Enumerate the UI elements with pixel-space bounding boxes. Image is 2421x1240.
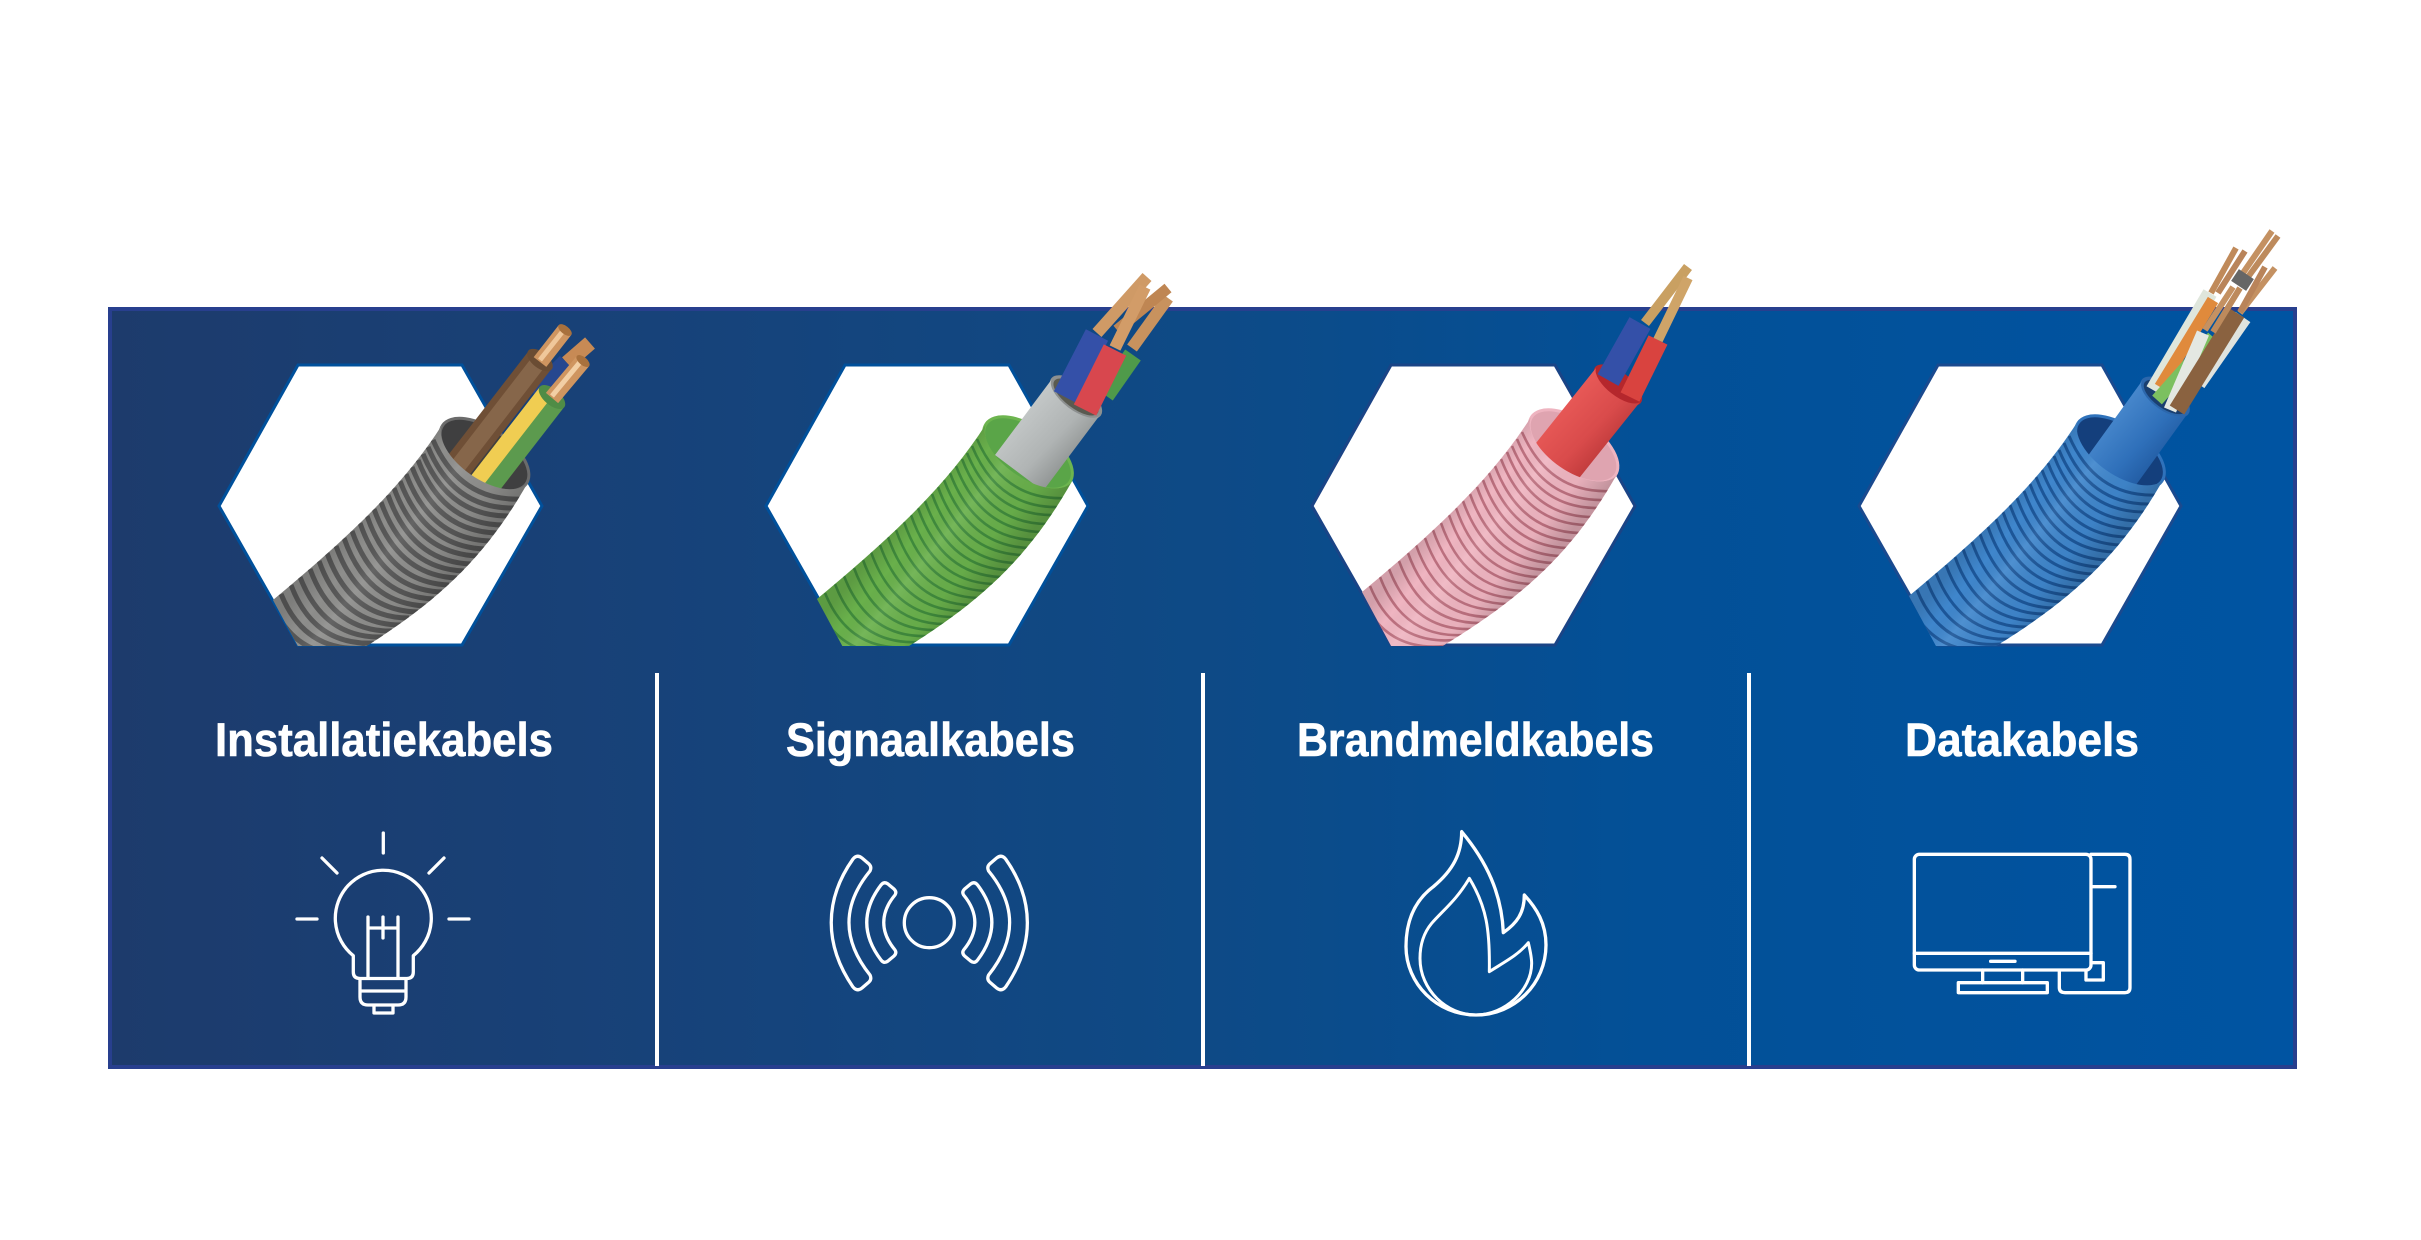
column: Signaalkabels [766,277,1168,990]
title: Brandmeldkabels: Brandmeldkabels [1297,713,1654,766]
title: Signaalkabels: Signaalkabels [786,713,1075,766]
title: Installatiekabels: Installatiekabels [215,713,553,766]
icon: signal waves [831,856,1027,990]
column: Installatiekabels [215,322,592,1013]
panel: blue background band [110,309,2295,1067]
title: Datakabels: Datakabels [1905,713,2139,766]
hexagon: datakabels [1859,365,2181,645]
hexagon: signaalkabels [766,365,1088,645]
cable: blue conduit with data wires [1909,229,2280,646]
icon: light bulb [297,833,469,1013]
hexagon: installatiekabels [219,365,542,645]
icon: flame [1406,832,1546,1015]
divider 3 [1747,673,1751,1066]
hexagon: brandmeldkabels [1312,365,1635,645]
divider 2 [1201,673,1205,1066]
cable: grey conduit with brown, blue and yellow-green wires [273,324,595,646]
cable: pink conduit with red jacket and wires [1362,264,1692,646]
icon: desktop computer [1914,854,2130,993]
cable: green conduit with grey jacket and coloured wires [817,273,1173,646]
divider 1 [655,673,659,1066]
column: Brandmeldkabels [1297,267,1688,1015]
column: Datakabels [1859,231,2278,993]
